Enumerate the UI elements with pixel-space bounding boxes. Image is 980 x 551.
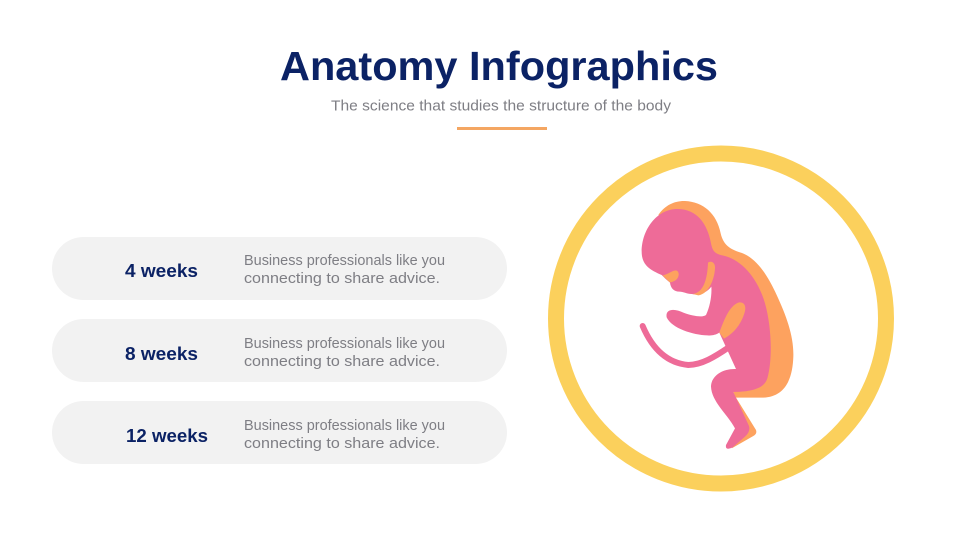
- body: [642, 209, 771, 449]
- yellow ring: [556, 154, 886, 484]
- description: 4 weeks: [244, 253, 445, 287]
- description: 12 weeks: connecting to share advice.: [244, 436, 440, 452]
- label: 12 weeks: 12 weeks: [126, 425, 208, 446]
- panel: 4 weeks: [52, 237, 507, 300]
- neck accent: [693, 262, 715, 295]
- panel: 8 weeks: [52, 319, 507, 382]
- umbilical cord: [643, 326, 728, 365]
- mouth accent: [663, 270, 679, 282]
- description: 8 weeks: connecting to share advice.: [244, 354, 440, 370]
- description: 8 weeks: [244, 336, 445, 370]
- description: 12 weeks: Business professionals like you: [244, 418, 445, 434]
- icon: fetus: [642, 201, 793, 449]
- description: 4 weeks: connecting to share advice.: [244, 271, 440, 287]
- label: 8 weeks: 8 weeks: [125, 343, 198, 364]
- title: Anatomy Infographics: [280, 43, 718, 89]
- description: 12 weeks: [244, 418, 445, 452]
- accent rule: [457, 127, 547, 130]
- arm accent: [719, 302, 745, 339]
- label: 4 weeks: 4 weeks: [125, 260, 198, 281]
- description: 4 weeks: Business professionals like you: [244, 253, 445, 269]
- panel: 12 weeks: [52, 401, 507, 464]
- subtitle: The science that studies the structure of the body: [331, 98, 672, 114]
- description: 8 weeks: Business professionals like you: [244, 336, 445, 352]
